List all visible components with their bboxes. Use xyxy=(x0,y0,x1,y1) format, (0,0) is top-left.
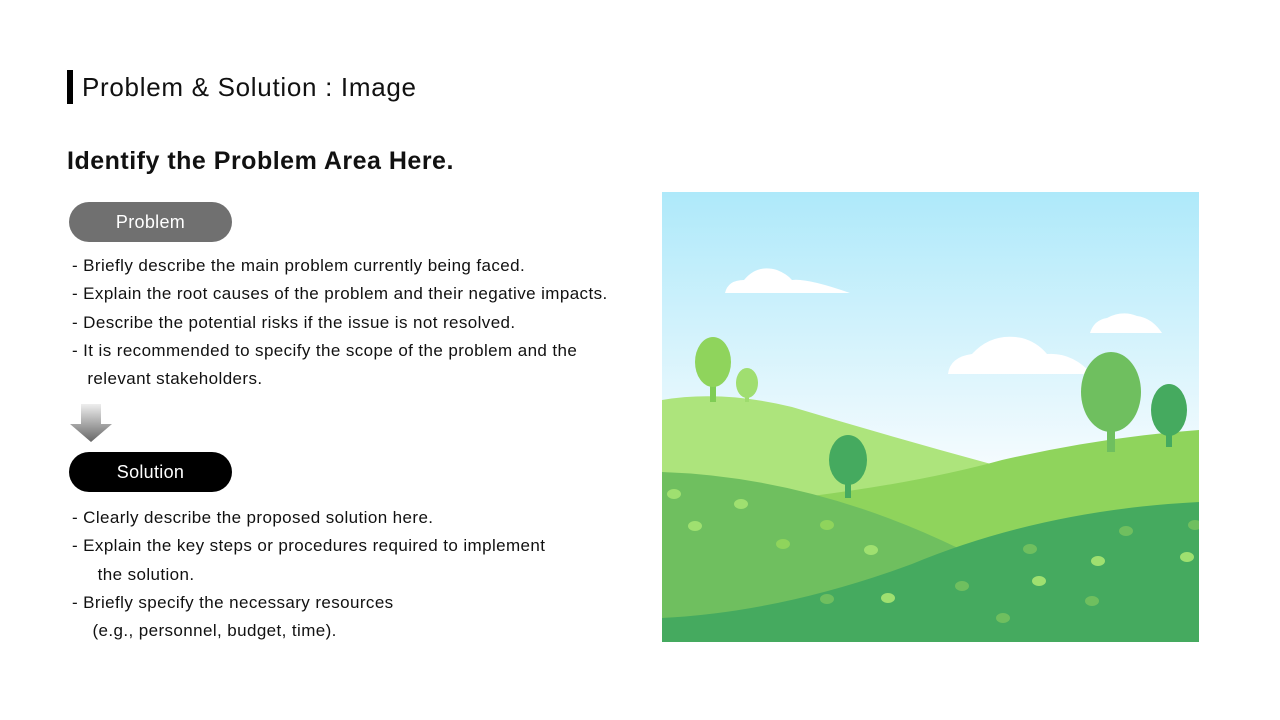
text: solution: - Clearly describe the proposed solution here. - Explain the key steps or procedures required to implement the solution. - Briefly specify the necessary resources (e.g., personnel, budget, time). xyxy=(72,508,545,640)
dots xyxy=(667,489,1194,603)
title: Problem & Solution : Image xyxy=(82,72,417,102)
pill: solution xyxy=(69,452,232,492)
pill: solution: Solution xyxy=(117,462,184,482)
pill: problem xyxy=(69,202,232,242)
subheading: Identify the Problem Area Here. xyxy=(67,147,454,175)
image: landscape xyxy=(662,192,1199,642)
hills xyxy=(662,396,1199,642)
pill: problem: Problem xyxy=(116,212,185,232)
arrow: down xyxy=(70,404,112,442)
text: problem: - Briefly describe the main problem currently being faced. - Explain the root causes of the problem and their negative impacts. - Describe the potential risks if the issue is not resolved. - It is recommended to specify the scope of the problem and the relevant stakeholders. xyxy=(72,256,608,388)
trees xyxy=(695,337,1187,498)
clouds xyxy=(725,268,1162,374)
